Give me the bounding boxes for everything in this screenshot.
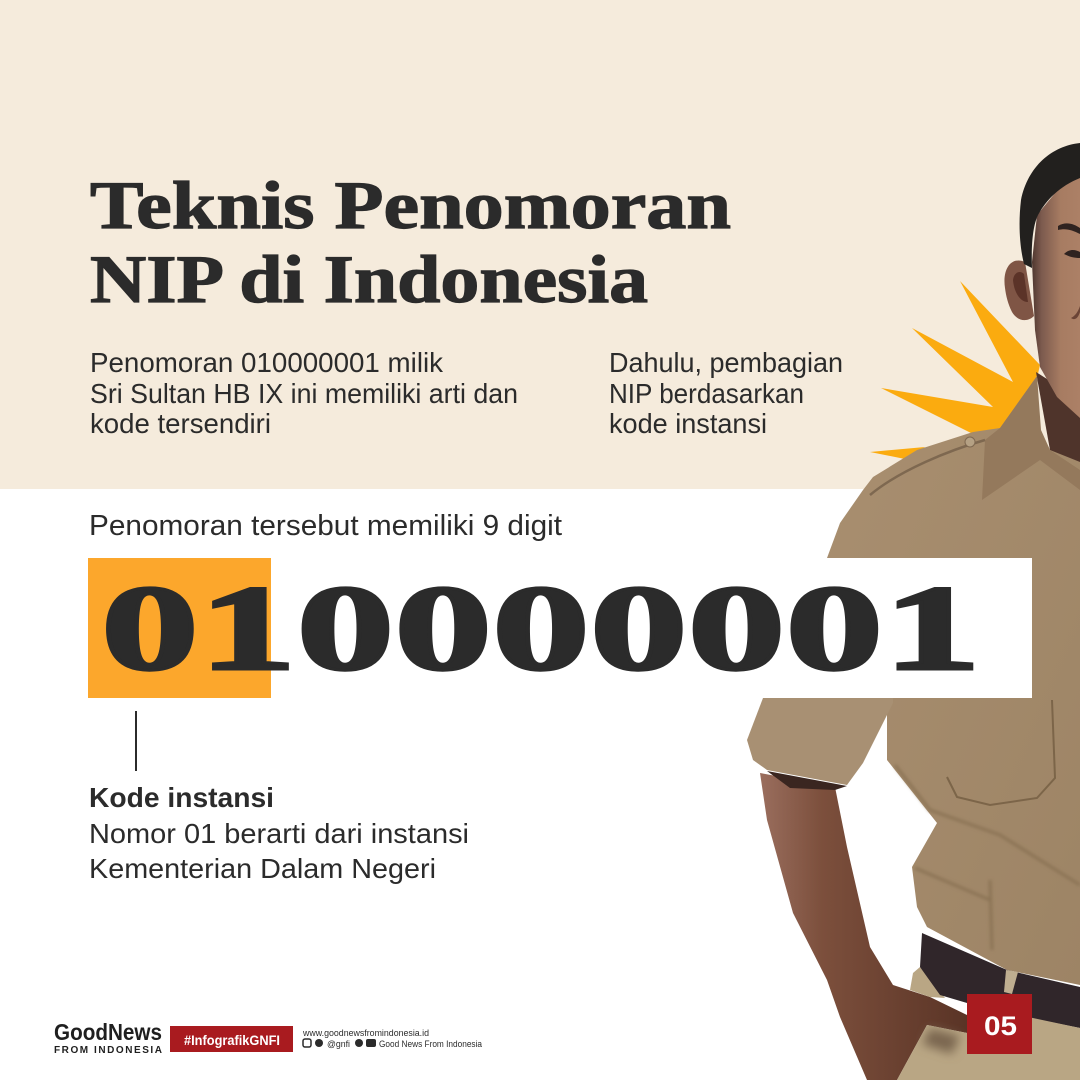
hair [1020, 143, 1080, 268]
text block: right description: NIP berdasarkan [609, 378, 804, 409]
neck [1036, 372, 1080, 475]
text block: right description: kode instansi [609, 408, 767, 439]
collar [982, 376, 1080, 500]
number: 010000001: 010000001 [101, 561, 981, 696]
icon: orange sunburst [870, 281, 1040, 459]
social media links: Good News From Indonesia [379, 1039, 482, 1049]
text block: right description: Dahulu, pembagian [609, 347, 843, 378]
logo: GoodNews from Indonesia [54, 1019, 162, 1056]
icons: social [303, 1039, 376, 1047]
text block: right description [609, 347, 843, 439]
title: Teknis Penomoran [90, 167, 731, 243]
trousers [897, 1004, 1080, 1080]
sleeve [747, 698, 893, 785]
page number badge: 05 [984, 1011, 1017, 1041]
pocket [947, 700, 1055, 805]
logo: GoodNews from Indonesia: FROM INDONESIA [54, 1045, 162, 1056]
text block: left description: Sri Sultan HB IX ini memiliki arti dan [90, 378, 518, 409]
social media links: @gnfi [327, 1039, 350, 1049]
beige header panel [0, 0, 1080, 489]
text block: left description: kode tersendiri [90, 408, 271, 439]
callout: kode instansi: Kementerian Dalam Negeri [89, 853, 436, 884]
ear [1004, 260, 1034, 320]
photo: man in uniform [747, 143, 1080, 1080]
title [90, 167, 731, 317]
trousers behind hand [910, 967, 945, 998]
number highlight: orange box [88, 558, 271, 698]
callout: kode instansi [89, 782, 469, 884]
callout: kode instansi: Nomor 01 berarti dari instansi [89, 818, 469, 849]
facial features [1058, 223, 1080, 319]
face [1032, 175, 1080, 418]
callout: kode instansi: Kode instansi [89, 782, 274, 813]
social media links: www.goodnewsfromindonesia.id [302, 1028, 429, 1038]
page number badge [967, 994, 1032, 1054]
belt loop [1004, 970, 1018, 994]
title: NIP di Indonesia [90, 241, 648, 317]
text block: left description: Penomoran 010000001 milik [90, 347, 444, 378]
arm [760, 773, 967, 1080]
belt [920, 933, 1080, 1028]
text block: left description [90, 347, 518, 439]
shirt fold [895, 765, 1080, 950]
number panel: white strip [271, 558, 1032, 698]
connector line [135, 711, 137, 771]
shirt body [827, 376, 1080, 985]
shoulder strap [870, 440, 985, 495]
hashtag badge [170, 1026, 293, 1052]
subheading: Penomoran tersebut memiliki 9 digit [89, 510, 562, 542]
shoulder button [965, 437, 975, 447]
hashtag badge: #InfografikGNFI [184, 1032, 280, 1048]
social media links [302, 1028, 482, 1049]
logo: GoodNews from Indonesia: GoodNews [54, 1019, 162, 1045]
